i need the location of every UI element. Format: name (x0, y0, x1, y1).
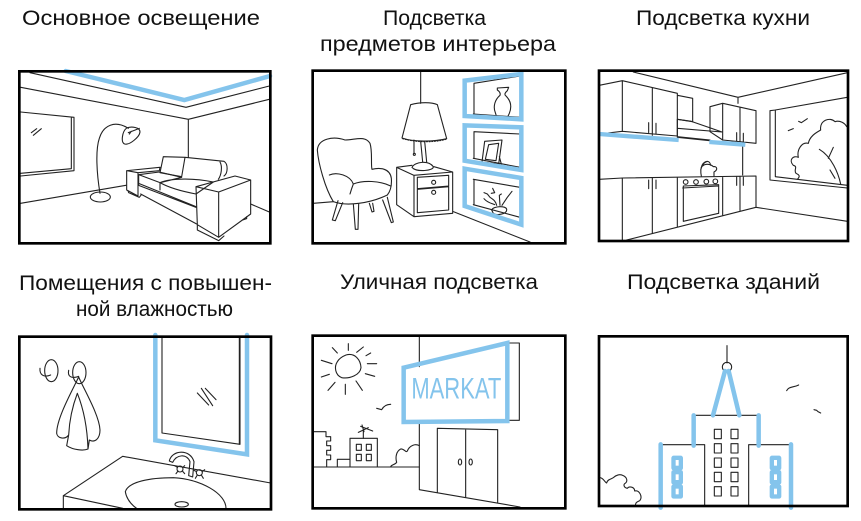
armchair (317, 138, 393, 229)
building outline (661, 415, 792, 506)
window (770, 97, 847, 188)
title: street lighting: Уличная подсветка (340, 271, 538, 294)
title: interior items lighting: предметов интерьера (320, 33, 556, 56)
frame (19, 337, 271, 509)
frame (599, 71, 848, 241)
picture frame (481, 140, 502, 165)
floor lamp (90, 124, 140, 202)
vase (494, 87, 511, 119)
birds (787, 385, 821, 413)
sign text MARKAT: MARKAT (411, 372, 501, 405)
tree and birds (788, 119, 847, 184)
plant (484, 188, 512, 215)
frame (599, 336, 848, 506)
niche lines (473, 76, 520, 217)
panel: street (313, 336, 565, 508)
title: interior items lighting (320, 7, 556, 56)
room lines (633, 72, 847, 221)
mirror light strip (155, 335, 247, 454)
title: humid rooms: ной влажностью (76, 298, 233, 321)
title: humid rooms (19, 272, 272, 321)
niche light strips (465, 74, 521, 225)
bush (391, 445, 419, 467)
basin (63, 456, 271, 509)
building light strips (661, 371, 791, 508)
upper cabinets (599, 81, 756, 143)
title: humid rooms: Помещения с повышен- (19, 272, 272, 295)
lower cabinets (599, 176, 756, 240)
panel: main lighting room (19, 71, 270, 243)
cabinet light strips (599, 134, 745, 145)
panel: interior items (313, 71, 565, 243)
title: main lighting: Основное освещение (22, 7, 260, 30)
title: building lighting: Подсветка зданий (627, 271, 820, 294)
sign frame light (404, 343, 507, 422)
towel (57, 377, 100, 450)
range hood (677, 119, 722, 142)
bird (377, 404, 391, 410)
oven and kettle (683, 161, 719, 221)
buildings (313, 425, 419, 467)
lit side windows (671, 456, 781, 499)
panel: humid room (19, 335, 271, 509)
ceiling light strip (66, 71, 270, 100)
wall lines (313, 71, 530, 242)
mirror (162, 337, 240, 444)
panel: kitchen (599, 71, 848, 241)
store building and doors (419, 337, 520, 507)
title: interior items lighting: Подсветка (383, 7, 486, 30)
frame (313, 336, 565, 508)
sofa (127, 157, 251, 241)
title: kitchen lighting: Подсветка кухни (636, 7, 810, 30)
window (21, 112, 74, 176)
panel: buildings (599, 336, 848, 508)
faucet (169, 452, 205, 478)
frame (313, 71, 565, 243)
room lines (21, 73, 269, 212)
sun (321, 344, 377, 394)
central windows (714, 429, 738, 496)
spire (725, 346, 729, 363)
bush (600, 475, 641, 506)
nightstand (397, 165, 453, 217)
frame (19, 71, 270, 243)
table lamp (402, 103, 447, 171)
hooks (40, 360, 86, 384)
